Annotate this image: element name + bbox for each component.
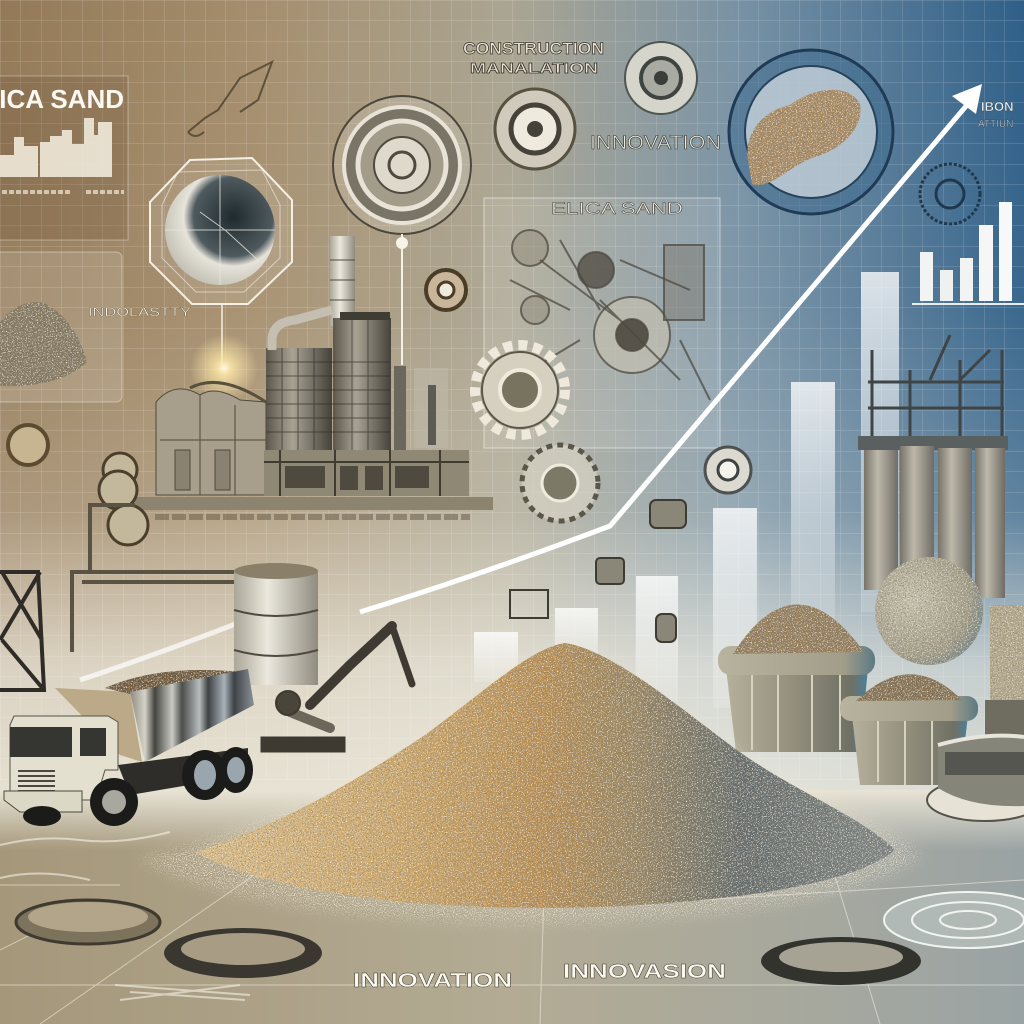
label: innovation bottom left: INNOVATION	[353, 970, 512, 992]
excavator arm	[261, 626, 412, 752]
glow light	[190, 334, 258, 402]
grille	[18, 771, 55, 791]
panel: central silica sand sketch	[484, 198, 720, 448]
conveyor frame	[72, 505, 315, 652]
pin line: globe to light	[221, 304, 223, 365]
main silo	[333, 318, 391, 450]
truck bed ribs	[130, 669, 254, 762]
main sand pile	[140, 642, 922, 923]
pylon	[0, 572, 44, 690]
panel: sand heap industry	[0, 252, 191, 402]
sand body	[195, 643, 895, 908]
icon: concentric circle dial	[333, 96, 471, 234]
pot of sand small	[840, 674, 978, 785]
shelf caption	[155, 514, 470, 520]
sketch machinery	[510, 230, 710, 400]
stacked coils	[99, 453, 148, 545]
scattered grains	[140, 642, 922, 923]
factory	[135, 236, 493, 517]
tanks	[156, 389, 266, 495]
mini bar chart	[0, 118, 112, 177]
heading: silica sand centre: ELICA SAND	[551, 199, 683, 218]
label: innovasion bottom right: INNOVASION	[563, 961, 726, 983]
icon: gear lower	[522, 445, 598, 521]
growth arrow	[360, 84, 982, 612]
icon: round badge left	[495, 89, 575, 169]
floor dish centre-left	[164, 928, 322, 978]
line graph top	[188, 62, 272, 136]
icon: small dial	[705, 447, 751, 493]
pot of sand large	[718, 604, 875, 752]
pipe	[272, 310, 332, 350]
wheels	[90, 778, 138, 826]
icon: gear large	[475, 345, 565, 435]
label: innovation top: INNOVATION	[590, 133, 721, 154]
floor	[0, 790, 1024, 1024]
label: top right	[978, 99, 1014, 130]
truck	[4, 669, 254, 826]
shelf	[135, 497, 493, 510]
truck load	[105, 670, 240, 694]
small devices	[510, 500, 686, 642]
icon: small sand heap	[0, 302, 87, 386]
chart caption	[2, 190, 124, 194]
icon: left dial	[8, 425, 48, 465]
water ripple	[884, 892, 1024, 948]
label: top right: IBON	[981, 99, 1014, 114]
heading: construction: MANALATION	[470, 60, 598, 77]
silo roof rail	[340, 312, 390, 320]
truck cab	[10, 716, 118, 800]
translucent bars	[474, 272, 899, 708]
heading: construction: CONSTRUCTION	[463, 39, 604, 58]
right equipment	[394, 366, 406, 450]
heading: construction	[463, 39, 604, 77]
barrel	[234, 563, 318, 685]
floor dish left	[16, 900, 160, 944]
left silos	[266, 348, 332, 450]
right plant	[858, 335, 1008, 598]
floor dish right	[761, 937, 921, 985]
panel: top-left silica sand chart	[0, 76, 128, 240]
icon: sand sample circle	[729, 50, 893, 214]
icon: globe in octagon	[150, 158, 292, 304]
chimney tower	[330, 236, 355, 326]
chassis	[118, 748, 248, 795]
label: industry: INDOLASTTY	[88, 305, 191, 319]
plant base	[264, 450, 469, 496]
right machines	[927, 605, 1024, 821]
icon: swirl on stem	[426, 270, 466, 310]
label: top right: ATTIUN	[978, 119, 1013, 130]
icon: round badge right	[625, 42, 697, 114]
truck bed wall	[55, 688, 142, 762]
lower swoosh	[80, 592, 315, 680]
bar chart top right	[912, 202, 1024, 304]
bumper	[4, 791, 82, 812]
icon: dial right	[920, 164, 980, 224]
sphere	[875, 557, 983, 665]
pin line	[401, 234, 403, 365]
